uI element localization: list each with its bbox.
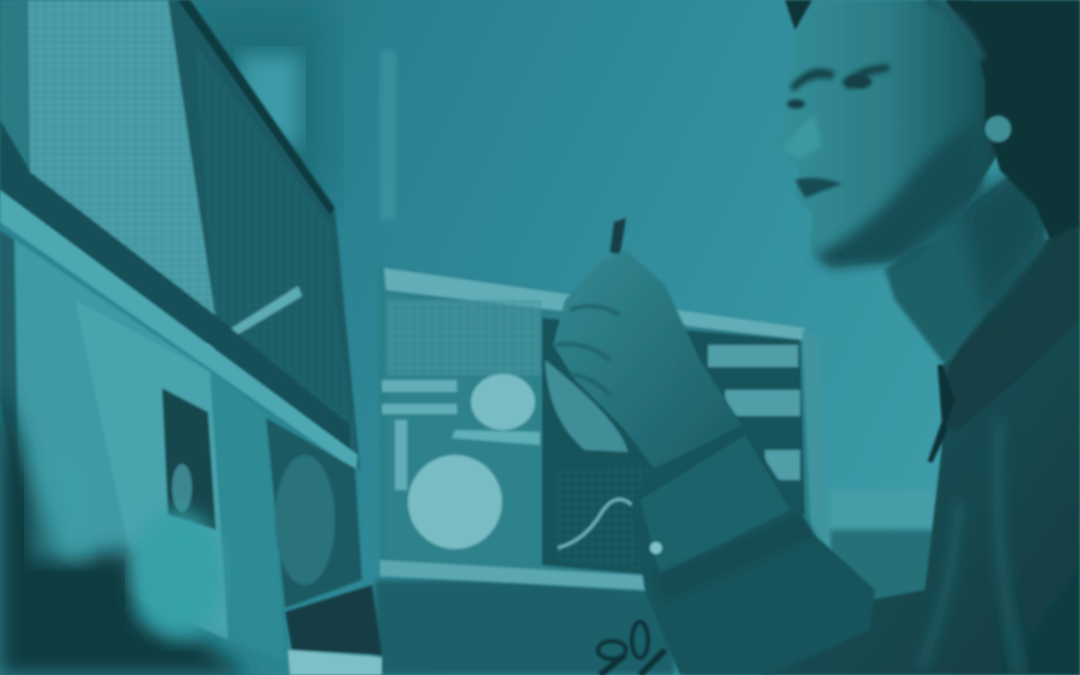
left upper monitor (0, 0, 360, 470)
person: sleeve and arm (632, 430, 875, 675)
scissors on desk (598, 622, 665, 675)
globe (408, 455, 502, 549)
foreground blurred shoulder and hand (0, 380, 250, 675)
person: hair and ear (785, 0, 1080, 240)
person: torso and shirt (760, 222, 1080, 675)
person: neck (885, 150, 1045, 365)
person: hand holding pen (553, 218, 742, 470)
center monitor with charts (378, 266, 830, 592)
person: face (778, 0, 1000, 268)
left lower monitor (0, 190, 382, 675)
